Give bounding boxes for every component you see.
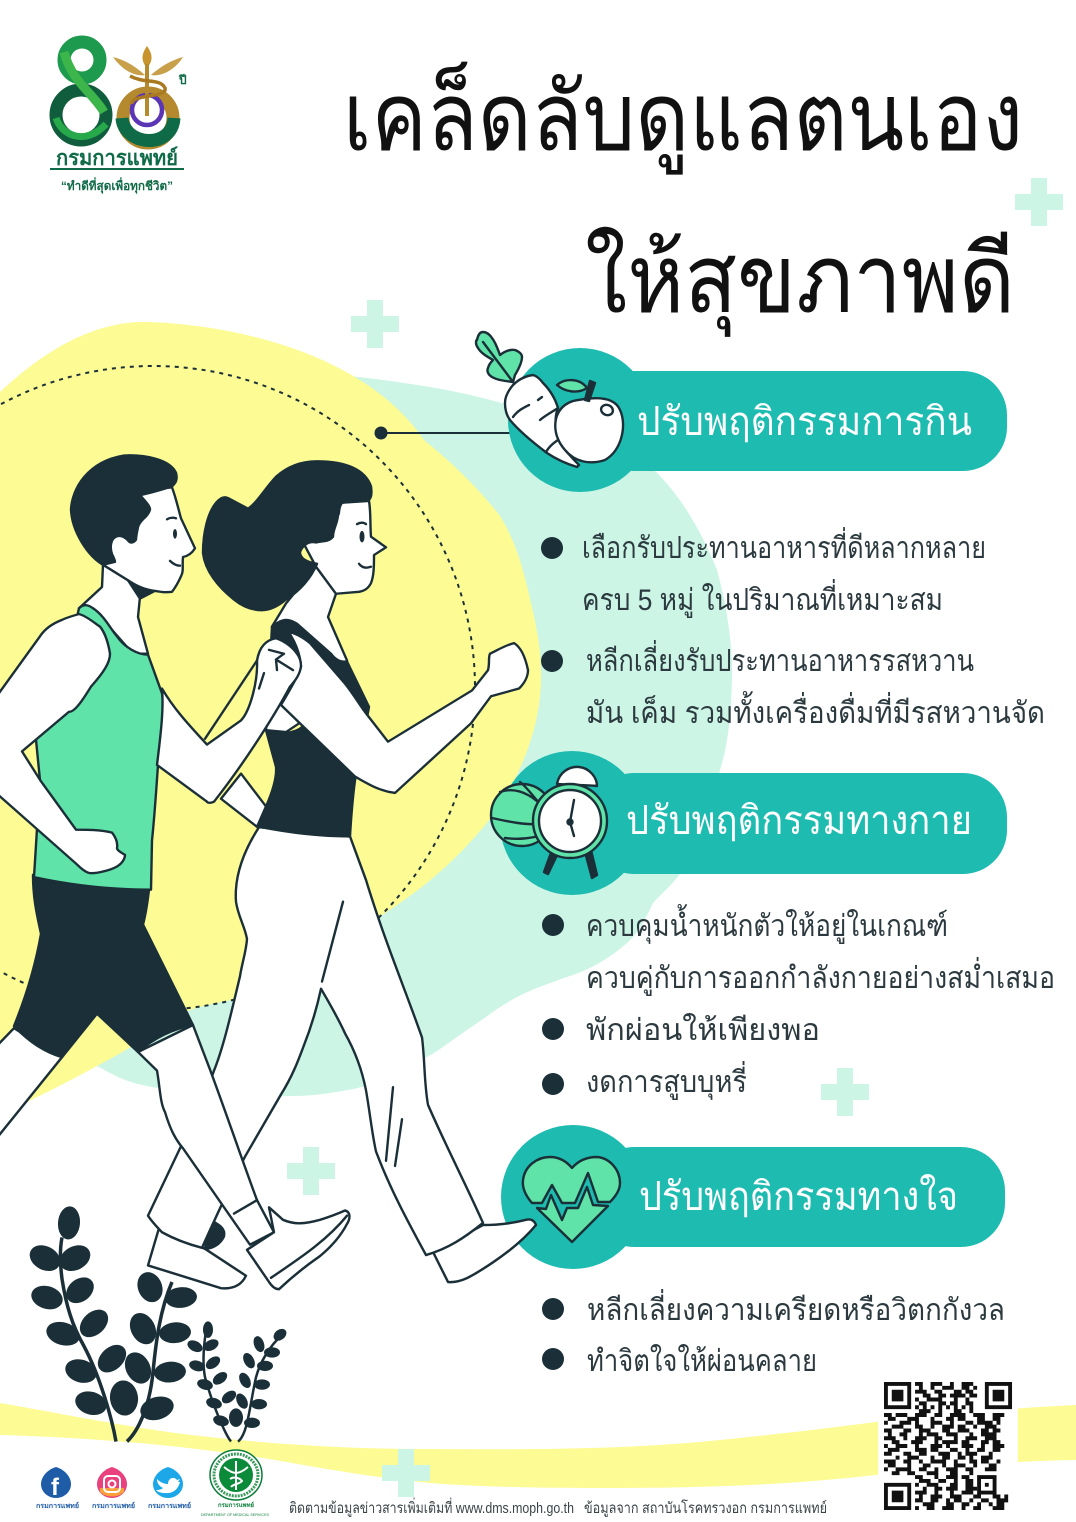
woman head — [300, 501, 386, 594]
icon: instagram: กรมการแพทย์ — [92, 1501, 135, 1510]
footer credits: ติดตามข้อมูลข่าวสารเพิ่มเติมที่ www.dms.moph.go.th — [289, 1497, 574, 1517]
dashed orbit circle — [0, 366, 475, 1010]
icon: heart with ECG — [523, 1157, 620, 1242]
emblem: Ministry of Public Health: กรมการแพทย์ — [218, 1501, 254, 1509]
icon: facebook — [36, 1467, 79, 1510]
woman top — [259, 620, 369, 836]
icon: ball and alarm clock — [491, 767, 607, 878]
icon: facebook: กรมการแพทย์ — [36, 1501, 79, 1510]
man hair — [71, 455, 177, 565]
heading text: ปรับพฤติกรรมทางใจ — [639, 1173, 958, 1219]
icon: instagram — [92, 1467, 135, 1510]
man shorts — [14, 875, 193, 1057]
text block: eating tips: ครบ 5 หมู่ ในปริมาณที่เหมาะสม — [582, 579, 943, 618]
man figure, lower body — [0, 875, 349, 1289]
text block: exercise tips: งดการสูบบุหรี่ — [586, 1061, 747, 1101]
man figure, upper body — [0, 455, 195, 890]
woman front shoe — [433, 1219, 536, 1282]
text block: exercise tips — [542, 904, 1055, 1101]
text block: mental tips: ทำจิตใจให้ผ่อนคลาย — [587, 1344, 817, 1378]
woman eye and smile — [360, 531, 364, 543]
title: ให้สุขภาพดี — [585, 227, 1015, 337]
decorative plus marks — [287, 178, 1063, 1497]
woman figure, lower body — [148, 827, 536, 1288]
woman trousers — [148, 827, 483, 1255]
man front arm and hand on woman's shoulder — [157, 638, 301, 803]
heading pill: mental — [501, 1125, 1005, 1269]
woman rear arm — [221, 774, 266, 827]
text block: eating tips: มัน เค็ม รวมทั้งเครื่องดื่มที่มีรสหวานจัด — [586, 691, 1045, 730]
text block: exercise tips: พักผ่อนให้เพียงพอ — [586, 1013, 820, 1047]
emblem: Ministry of Public Health: DEPARTMENT OF MEDICAL SERVICES — [201, 1512, 269, 1517]
man head — [103, 487, 195, 592]
woman figure, upper body — [203, 461, 528, 836]
icon: facebook: f — [51, 1474, 60, 1501]
woman rear shoe — [148, 1228, 246, 1288]
woman hair — [203, 461, 371, 610]
background blob: yellow — [0, 322, 541, 1119]
woman neck and chest — [266, 567, 347, 732]
heading text: ปรับพฤติกรรมทางกาย — [626, 799, 972, 843]
title — [343, 61, 1023, 337]
text block: eating tips: เลือกรับประทานอาหารที่ดีหลากหลาย — [582, 527, 986, 565]
man neck — [79, 565, 148, 654]
connector line with dot — [374, 426, 520, 440]
logo: Department of Medical Services 80 years — [50, 42, 187, 194]
text block: exercise tips: ควบคุมน้ำหนักตัวให้อยู่ในเกณฑ์ — [586, 904, 948, 945]
icon: twitter — [148, 1467, 191, 1510]
sock cuff — [234, 1200, 257, 1214]
QR code — [878, 1376, 1018, 1516]
man tank top — [34, 605, 164, 890]
woman front arm and fist — [281, 631, 528, 793]
logo: Department of Medical Services 80 years: “ทำดีที่สุดเพื่อทุกชีวิต” — [61, 177, 173, 194]
text block: eating tips — [541, 527, 1045, 730]
logo: Department of Medical Services 80 years: กรมการแพทย์ — [56, 146, 178, 170]
plants — [26, 1205, 289, 1442]
woman heel — [205, 1220, 224, 1249]
man rear leg — [0, 1028, 62, 1139]
icon: twitter: กรมการแพทย์ — [148, 1501, 191, 1510]
man rear arm — [0, 614, 125, 873]
footer credits — [289, 1497, 827, 1517]
background blob: mint — [97, 376, 732, 1097]
footer credits: ข้อมูลจาก สถาบันโรคทรวงอก กรมการแพทย์ — [584, 1499, 827, 1517]
man front leg — [138, 1025, 274, 1245]
text block: mental tips: หลีกเลี่ยงความเครียดหรือวิตกกังวล — [587, 1289, 1005, 1327]
trouser crease lines — [322, 902, 402, 1166]
text block: eating tips: หลีกเลี่ยงรับประทานอาหารรสหวาน — [586, 640, 974, 678]
man chin shadow — [128, 580, 155, 599]
icon: radish and apple — [476, 332, 623, 467]
heading pill: exercise — [491, 751, 1007, 895]
heading text: ปรับพฤติกรรมการกิน — [637, 400, 972, 444]
logo: Department of Medical Services 80 years: ปี — [178, 73, 187, 87]
text block: mental tips — [542, 1289, 1005, 1378]
heading pill: eating — [476, 332, 1007, 492]
man shoe — [247, 1207, 349, 1289]
background band: yellow wave — [0, 1403, 1076, 1488]
emblem: Ministry of Public Health — [201, 1450, 269, 1517]
man eye and smile — [173, 529, 177, 539]
